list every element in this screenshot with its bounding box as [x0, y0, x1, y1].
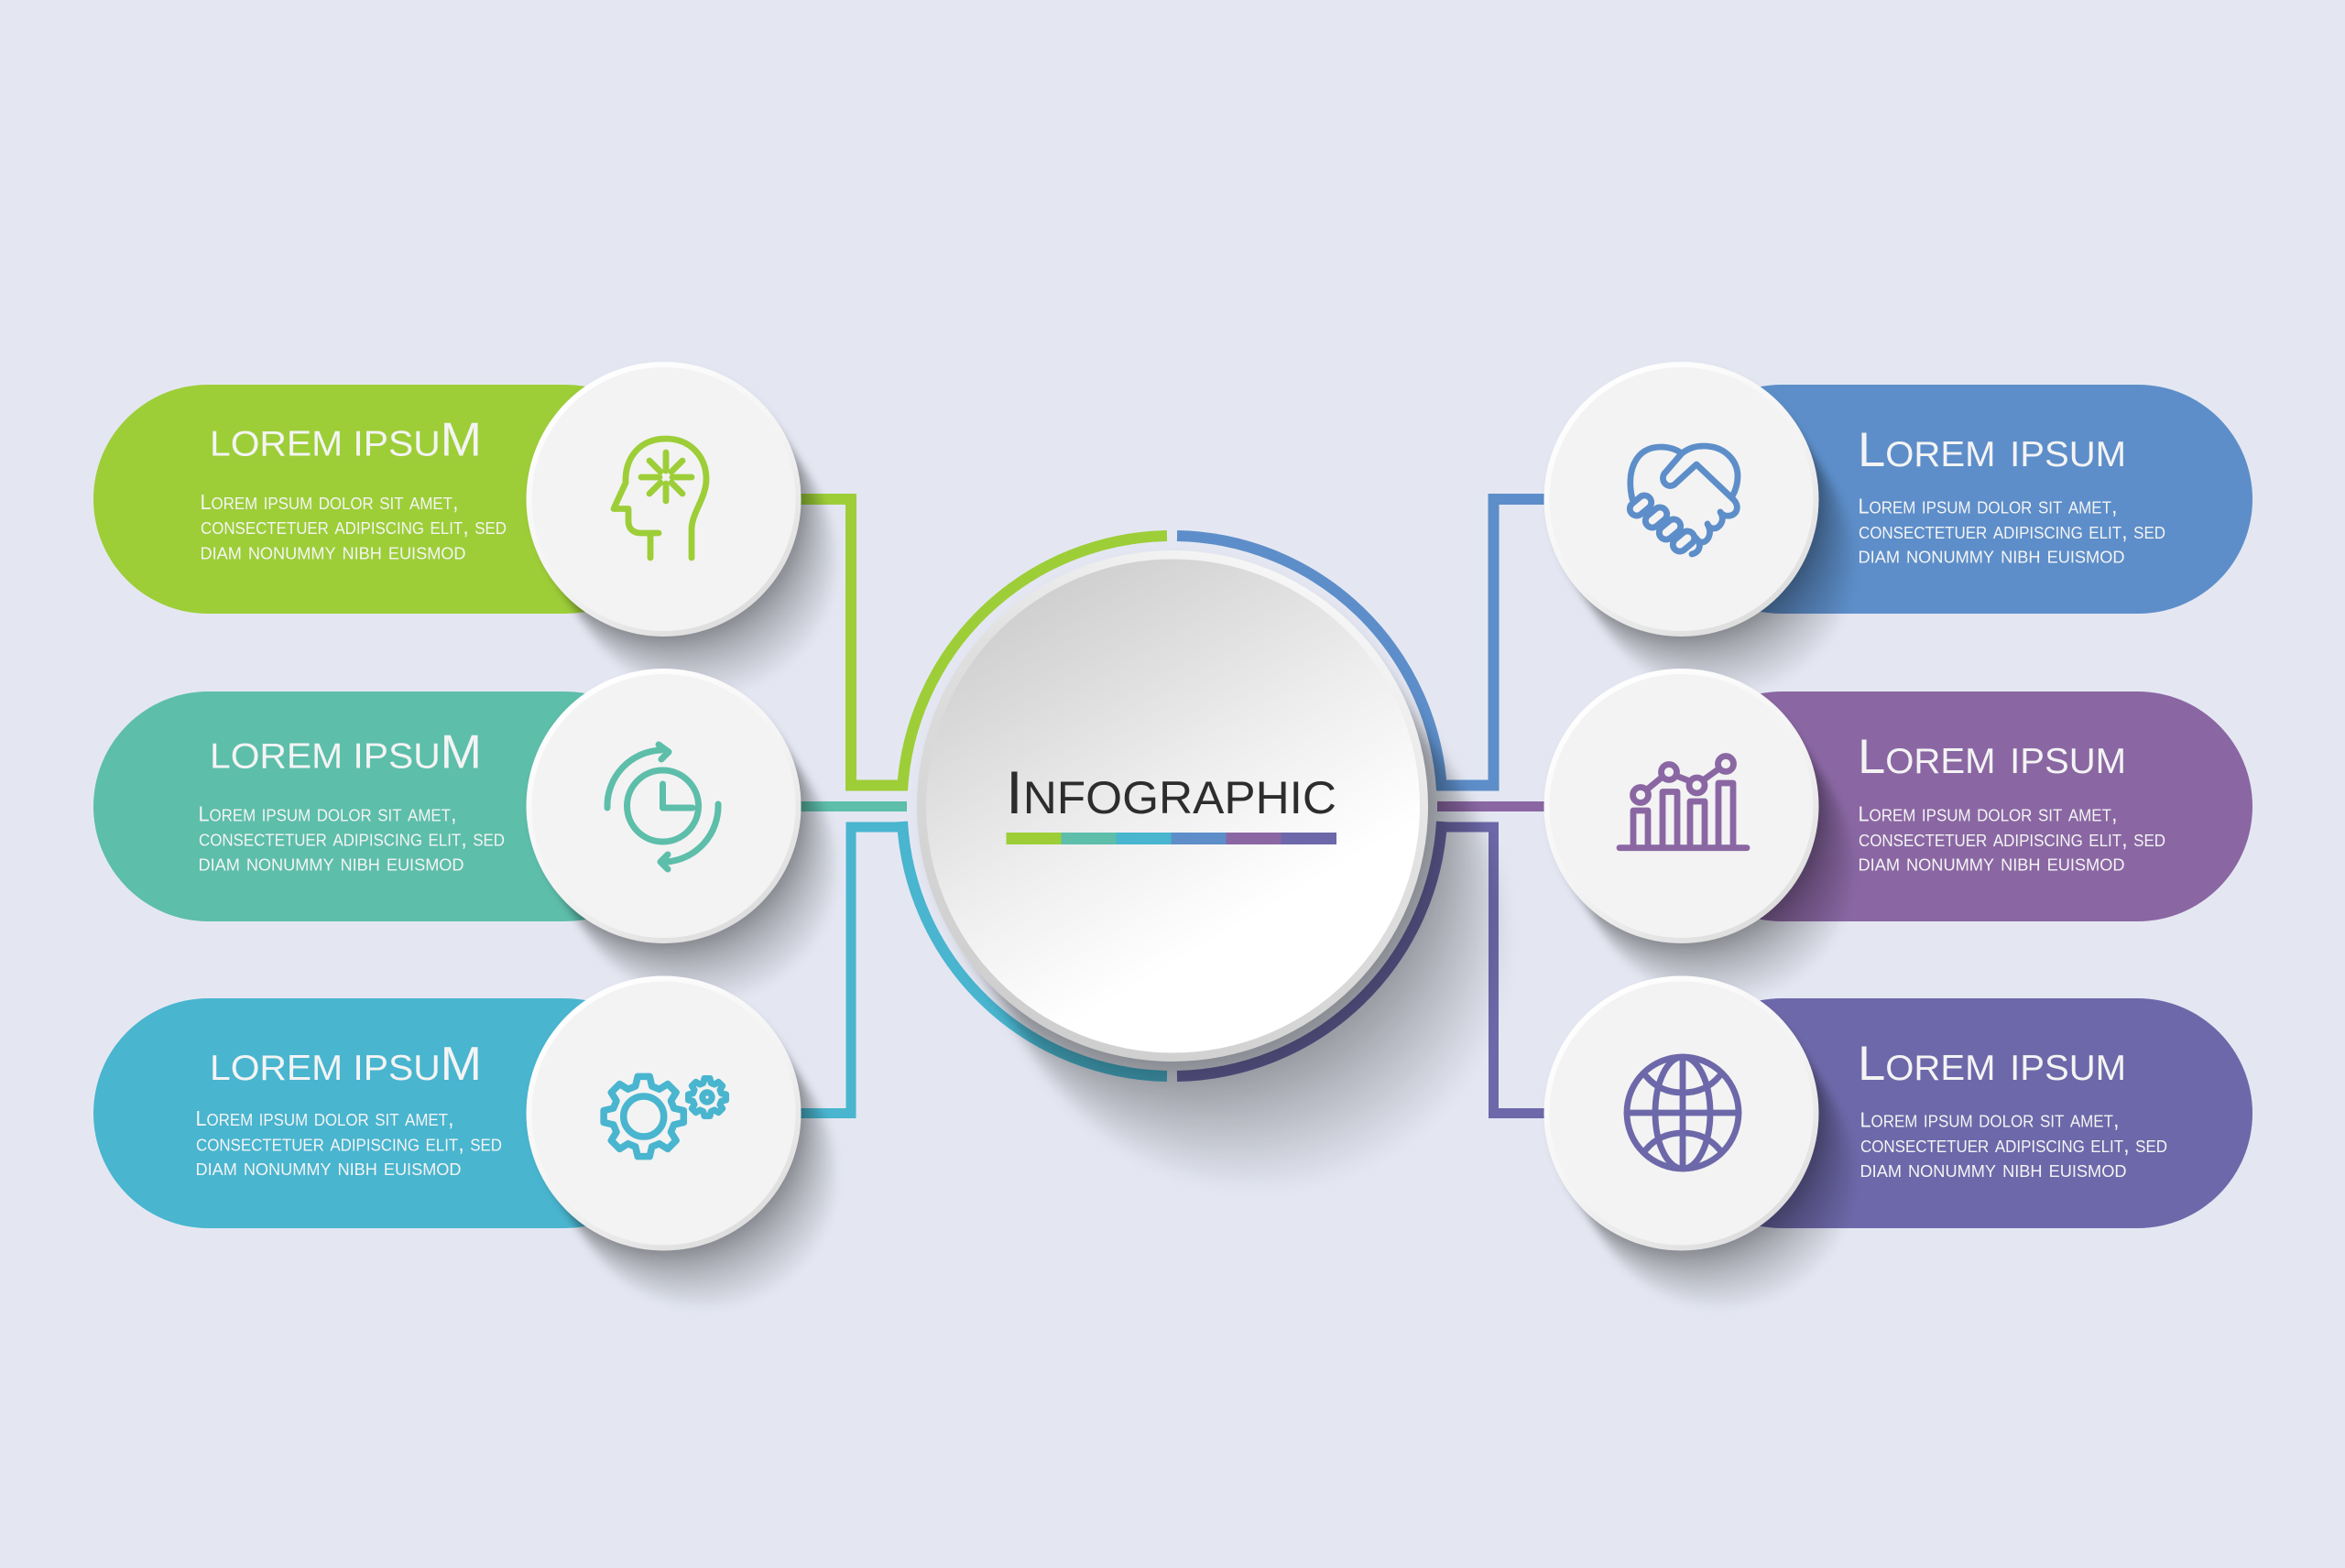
text block: cyan	[196, 1038, 502, 1181]
icon: head with spark	[614, 439, 706, 558]
icon: bar chart with line	[1620, 757, 1747, 848]
connector: green	[797, 499, 907, 786]
icon: gears	[604, 1076, 725, 1157]
icon: clock with arrows	[607, 745, 718, 869]
text block: indigo	[1858, 1034, 2167, 1182]
text block: blue: diam nonummy nibh euismod	[1858, 542, 2125, 568]
text block: blue: consectetuer adipiscing elit, sed	[1859, 518, 2165, 544]
ring arc: blue	[1177, 536, 1442, 790]
text block: purple: Lorem ipsum	[1858, 727, 2126, 784]
text block: indigo: diam nonummy nibh euismod	[1860, 1157, 2127, 1182]
pill: indigo	[1667, 998, 2252, 1228]
connector: cyan	[797, 827, 907, 1114]
connector: indigo	[1437, 827, 1548, 1114]
text block: cyan: Lorem ipsum dolor sit amet,	[196, 1105, 454, 1131]
text block: indigo: consectetuer adipiscing elit, sed	[1860, 1132, 2167, 1158]
text block: cyan: LOREM IPSUM	[210, 1038, 482, 1091]
colour bar	[1006, 833, 1336, 844]
text block: green: diam nonummy nibh euismod	[200, 539, 465, 564]
circle 5: chart	[1544, 669, 1819, 943]
text block: purple	[1858, 727, 2165, 876]
connector: purple	[1437, 801, 1548, 811]
text block: blue: Lorem ipsum	[1858, 420, 2126, 477]
centre title: Infographic	[1006, 756, 1336, 828]
shadows: small circles	[529, 365, 1855, 1308]
circle 3: gears	[526, 976, 801, 1251]
circle 1: head	[526, 362, 801, 637]
ring arc: cyan	[902, 822, 1167, 1076]
text block: purple: Lorem ipsum dolor sit amet,	[1858, 800, 2118, 826]
icon: handshake heart	[1627, 446, 1738, 554]
text block: purple: consectetuer adipiscing elit, sed	[1859, 826, 2165, 852]
text block: purple: diam nonummy nibh euismod	[1858, 850, 2125, 876]
text block: teal: consectetuer adipiscing elit, sed	[199, 826, 505, 852]
text block: indigo: Lorem ipsum dolor sit amet,	[1860, 1106, 2120, 1132]
connector: blue	[1437, 499, 1548, 786]
text block: cyan: diam nonummy nibh euismod	[196, 1155, 462, 1181]
pill: purple	[1667, 691, 2252, 921]
text block: blue	[1858, 420, 2165, 568]
pill: green	[93, 385, 680, 614]
text block: green: Lorem ipsum dolor sit amet,	[200, 489, 458, 515]
text block: cyan: consectetuer adipiscing elit, sed	[196, 1130, 502, 1156]
text block: teal: LOREM IPSUM	[210, 725, 482, 779]
circle 6: globe	[1544, 976, 1819, 1251]
pill: cyan	[93, 998, 680, 1228]
centre disc	[917, 550, 1428, 1062]
text block: green: LOREM IPSUM	[210, 414, 482, 467]
text block: blue: Lorem ipsum dolor sit amet,	[1858, 493, 2118, 518]
circle 4: handshake	[1544, 362, 1819, 637]
connector: teal	[797, 801, 907, 811]
shadow: centre circle	[922, 556, 1510, 1188]
text block: teal: Lorem ipsum dolor sit amet,	[198, 800, 456, 826]
ring arc: indigo	[1177, 822, 1442, 1076]
pill: blue	[1667, 385, 2252, 614]
text block: indigo: Lorem ipsum	[1858, 1034, 2126, 1091]
text block: green: consectetuer adipiscing elit, sed	[201, 514, 507, 539]
icon: globe	[1627, 1057, 1739, 1169]
ring arc: green	[902, 536, 1167, 790]
pill: teal	[93, 691, 680, 921]
text block: teal	[198, 725, 505, 876]
text block: teal: diam nonummy nibh euismod	[198, 850, 464, 876]
circle 2: clock	[526, 669, 801, 943]
text block: green	[200, 414, 507, 564]
